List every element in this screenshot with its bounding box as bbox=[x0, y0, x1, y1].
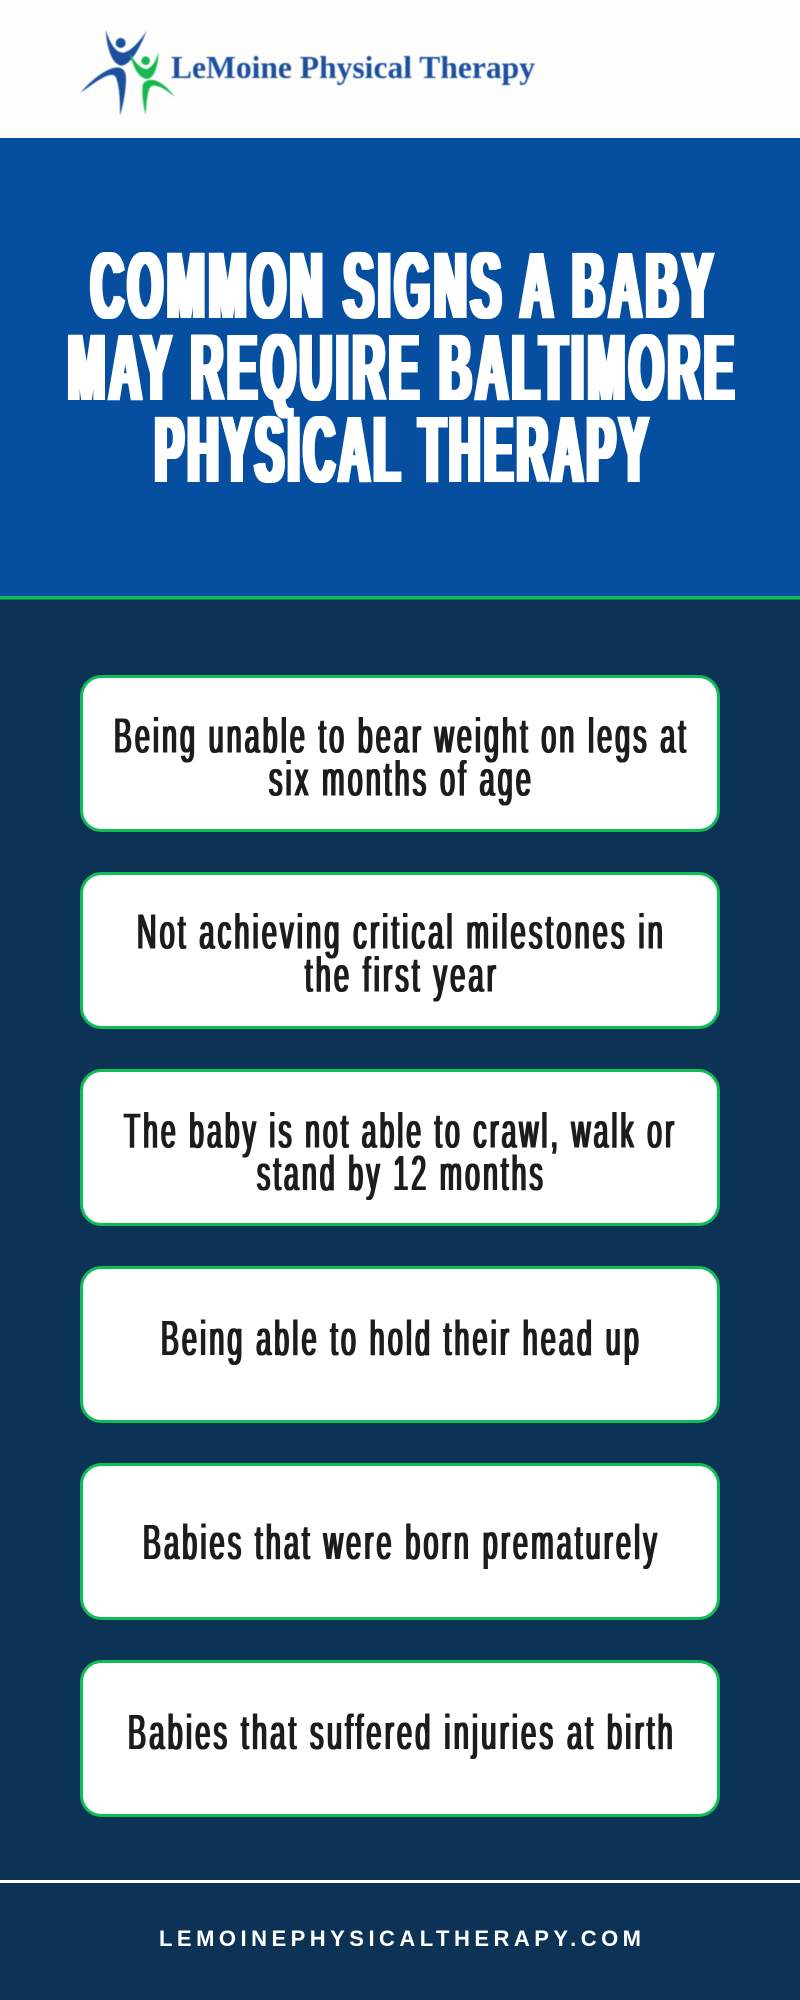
panel: title banner bbox=[0, 138, 800, 600]
card: hold head up bbox=[82, 1268, 718, 1422]
card: bear weight: six months of age bbox=[269, 752, 534, 807]
icon: LeMoine figures logo bbox=[81, 30, 174, 116]
card: crawl walk stand: stand by 12 months bbox=[257, 1146, 546, 1201]
footer website: LEMOINEPHYSICALTHERAPY.COM bbox=[159, 1926, 641, 1951]
panel: footer bbox=[0, 1880, 800, 2000]
card: bear weight bbox=[82, 676, 718, 830]
title bbox=[68, 233, 738, 503]
logo wordmark: LeMoine Physical Therapy bbox=[171, 49, 535, 85]
panel: signs list bbox=[0, 600, 800, 1880]
card: premature bbox=[82, 1464, 718, 1618]
card: milestones: the first year bbox=[305, 948, 499, 1003]
card: birth injuries bbox=[82, 1662, 718, 1816]
card: milestones bbox=[82, 874, 718, 1028]
panel: logo header bbox=[0, 0, 800, 138]
card: crawl walk stand bbox=[82, 1070, 718, 1224]
